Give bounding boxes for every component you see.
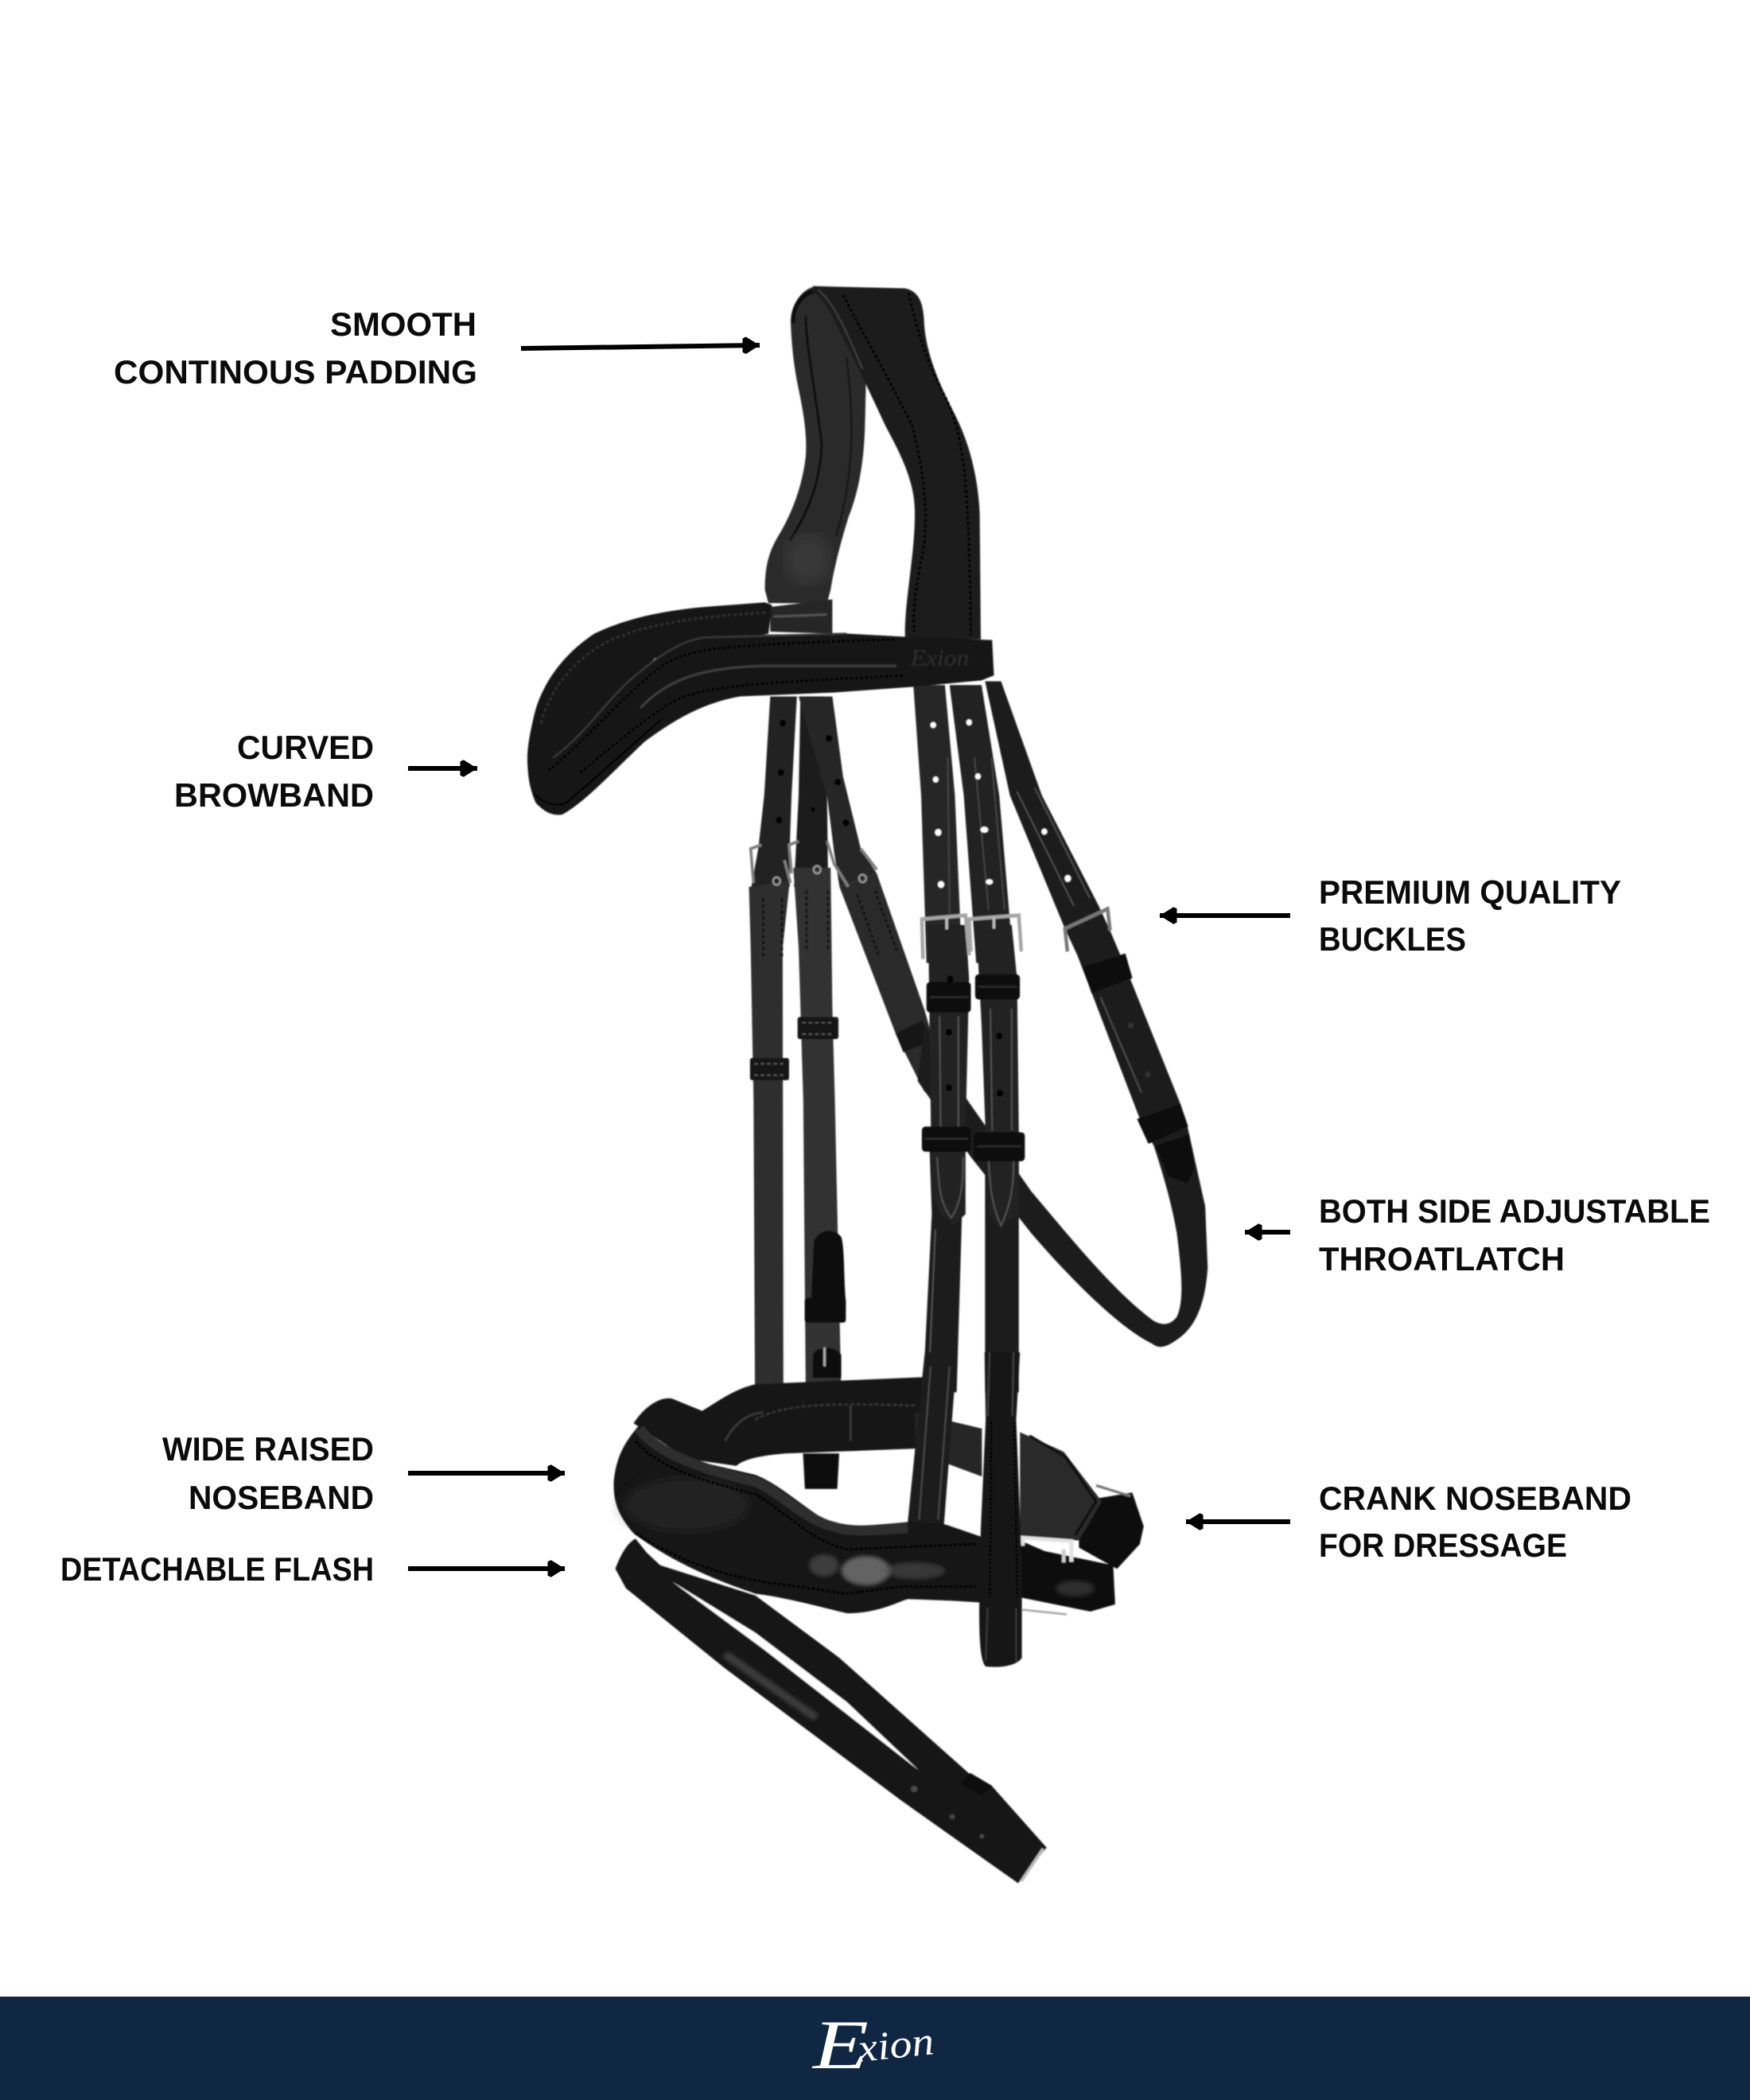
- label: wide raised noseband: WIDE RAISED: [162, 1430, 374, 1468]
- label: premium quality buckles: BUCKLES: [1319, 920, 1466, 958]
- arrow: to throatlatch: [1245, 1230, 1290, 1235]
- smooth padded crown: [765, 286, 981, 640]
- label: wide raised noseband: [162, 1430, 374, 1516]
- label: crank noseband for dressage: CRANK NOSEBAND: [1319, 1480, 1631, 1517]
- curved browband: [527, 602, 994, 815]
- arrow: to crown padding: [521, 345, 760, 348]
- arrow: to browband: [408, 766, 477, 771]
- label: crank noseband for dressage: [1319, 1480, 1631, 1564]
- label: crank noseband for dressage: FOR DRESSAGE: [1319, 1526, 1567, 1564]
- arrow: to buckles: [1160, 913, 1290, 918]
- footer logo: [811, 2007, 936, 2084]
- curved browband: Exion: [910, 645, 969, 671]
- footer logo: E: [811, 2007, 869, 2084]
- arrow: to noseband: [408, 1471, 565, 1476]
- footer bar: [0, 1997, 1750, 2100]
- cheek straps and throatlatch: [749, 681, 1208, 1392]
- label: curved browband: [174, 729, 374, 814]
- label: both side adjustable throatlatch: [1319, 1192, 1710, 1278]
- label: both side adjustable throatlatch: THROATLATCH: [1319, 1240, 1565, 1278]
- label: curved browband: BROWBAND: [174, 776, 374, 814]
- label: smooth continous padding: CONTINOUS PADDING: [114, 353, 477, 391]
- label: detachable flash: DETACHABLE FLASH: [60, 1550, 374, 1588]
- label: both side adjustable throatlatch: BOTH SIDE ADJUSTABLE: [1319, 1192, 1710, 1230]
- label: curved browband: CURVED: [237, 729, 374, 766]
- arrow: to crank noseband: [1186, 1519, 1290, 1524]
- label: premium quality buckles: [1319, 873, 1621, 958]
- arrow: to flash: [408, 1566, 565, 1571]
- label: wide raised noseband: NOSEBAND: [189, 1479, 374, 1516]
- footer logo: xion: [854, 2018, 936, 2071]
- noseband, crank and flash: [614, 1352, 1144, 1883]
- label: smooth continous padding: [114, 305, 477, 391]
- bridle illustration: [527, 286, 1208, 1883]
- label: smooth continous padding: SMOOTH: [330, 305, 476, 343]
- label: premium quality buckles: PREMIUM QUALITY: [1319, 873, 1621, 911]
